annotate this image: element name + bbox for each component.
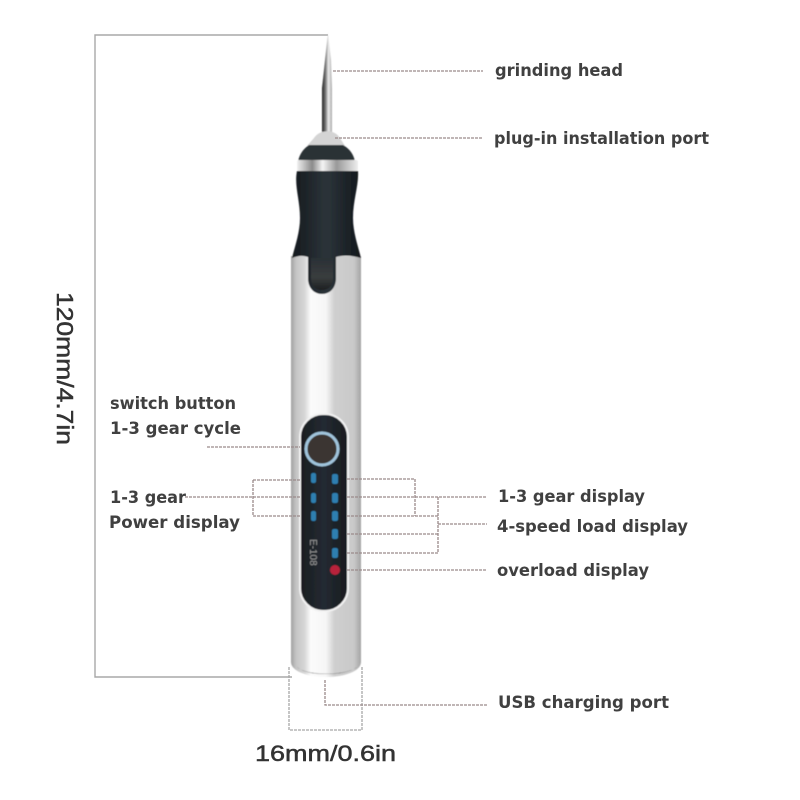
aluminium body bbox=[291, 256, 361, 677]
label: Power display: Power display bbox=[109, 513, 240, 532]
height dimension label: 120mm/4.7in bbox=[52, 292, 78, 445]
width dimension label: 16mm/0.6in bbox=[255, 741, 396, 766]
label: plug-in installation port: plug-in installation port bbox=[494, 129, 709, 148]
slot highlight bbox=[311, 258, 333, 290]
leader lines bbox=[185, 71, 487, 705]
label: overload display: overload display bbox=[497, 561, 649, 580]
rubber grip bbox=[292, 171, 361, 294]
black collar bbox=[298, 145, 355, 162]
label: USB charging port: USB charging port bbox=[498, 693, 669, 712]
label: grinding head: grinding head bbox=[495, 61, 623, 80]
model number: E-108 bbox=[307, 539, 318, 566]
label: 1-3 gear display: 1-3 gear display bbox=[498, 487, 645, 506]
height dimension bracket bbox=[95, 35, 328, 677]
width dimension bracket bbox=[289, 667, 362, 730]
charging end shadow bbox=[297, 667, 357, 674]
pen tool bbox=[291, 33, 361, 677]
control panel bbox=[300, 414, 348, 611]
label: 4-speed load display: 4-speed load display bbox=[497, 517, 688, 536]
grinding needle bbox=[322, 33, 332, 134]
power button bbox=[306, 433, 338, 465]
overload light bbox=[330, 565, 340, 575]
label: 1-3 gear: 1-3 gear bbox=[110, 488, 187, 507]
label: switch button: switch button bbox=[110, 394, 236, 413]
label: 1-3 gear cycle: 1-3 gear cycle bbox=[110, 419, 241, 438]
gear indicator lights bbox=[311, 473, 338, 558]
silver ring bbox=[297, 160, 358, 171]
installation port cone bbox=[307, 131, 345, 146]
